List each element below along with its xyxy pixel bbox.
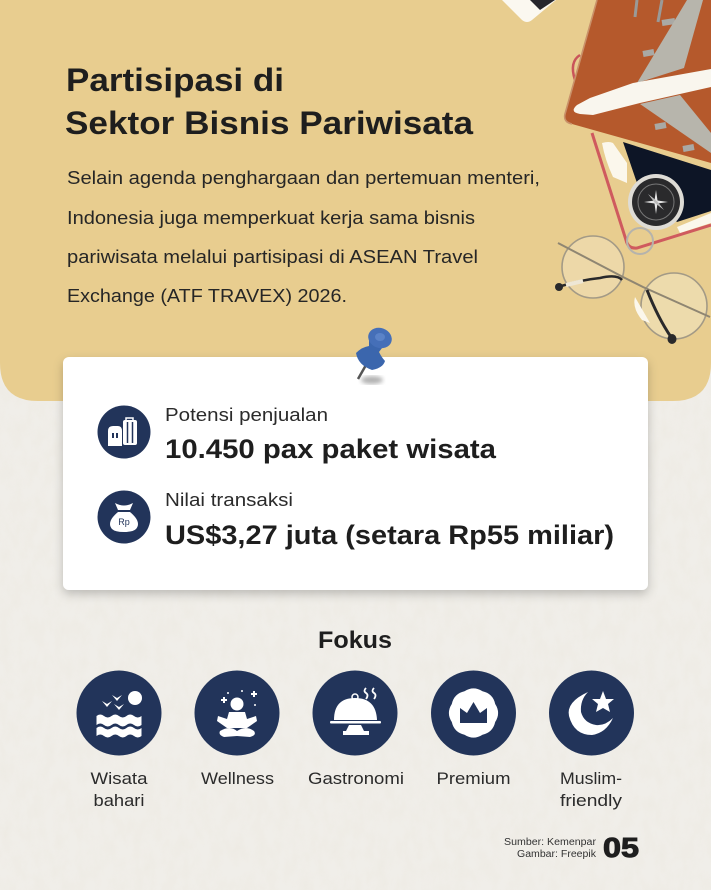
- text: transaction value: [165, 490, 614, 550]
- title: Sektor Bisnis Pariwisata: [65, 105, 473, 141]
- source credit: [504, 837, 597, 860]
- focus item: wellness: [194, 670, 280, 788]
- intro text: [67, 168, 540, 306]
- title: Partisipasi di: [66, 62, 284, 98]
- source credit: Gambar: Freepik: [517, 849, 597, 860]
- header panel: [0, 0, 711, 401]
- focus item: muslim-friendly: [549, 670, 634, 810]
- text: sales potential: Potensi penjualan: [165, 405, 328, 425]
- icon: phone corner: [502, 0, 556, 22]
- intro text: Exchange (ATF TRAVEX) 2026.: [67, 286, 347, 306]
- icon: push pin: [356, 324, 395, 384]
- icon: money bag: Rp: [118, 517, 130, 527]
- focus item: marine tourism: [76, 670, 162, 810]
- focus item: marine tourism: bahari: [94, 791, 144, 810]
- focus item: premium: Premium: [436, 769, 510, 788]
- icon: red tablet with dark screen: [573, 55, 711, 248]
- focus item: gastronomy: [308, 670, 404, 788]
- text: transaction value: Nilai transaksi: [165, 490, 293, 510]
- focus item: marine tourism: Wisata: [90, 769, 148, 788]
- intro text: Indonesia juga memperkuat kerja sama bisnis: [67, 208, 475, 228]
- focus item: wellness: Wellness: [201, 769, 274, 788]
- page number: 05: [603, 832, 639, 863]
- focus item: premium: [431, 670, 516, 788]
- icon: luggage: [98, 406, 150, 458]
- source credit: Sumber: Kemenpar: [504, 837, 597, 848]
- icon: brown notebook: [565, 0, 711, 163]
- icon: compass: [627, 174, 684, 254]
- focus item: gastronomy: Gastronomi: [308, 769, 404, 788]
- title: [65, 62, 473, 141]
- intro text: pariwisata melalui partisipasi di ASEAN Travel: [67, 247, 478, 267]
- heading: Fokus: Fokus: [318, 627, 392, 654]
- panel: stats card: [63, 357, 648, 590]
- text: sales potential: [165, 405, 497, 464]
- intro text: Selain agenda penghargaan dan pertemuan menteri,: [67, 168, 540, 188]
- text: transaction value: US$3,27 juta (setara Rp55 miliar): [165, 520, 614, 550]
- focus item: muslim-friendly: Muslim-: [560, 769, 622, 788]
- icon: glasses: [555, 236, 710, 344]
- icon: toy airplane: [574, 0, 711, 153]
- text: sales potential: 10.450 pax paket wisata: [165, 434, 497, 464]
- focus item: muslim-friendly: friendly: [560, 791, 623, 810]
- icon: money bag: [98, 490, 150, 544]
- photo: travel items: [502, 0, 711, 344]
